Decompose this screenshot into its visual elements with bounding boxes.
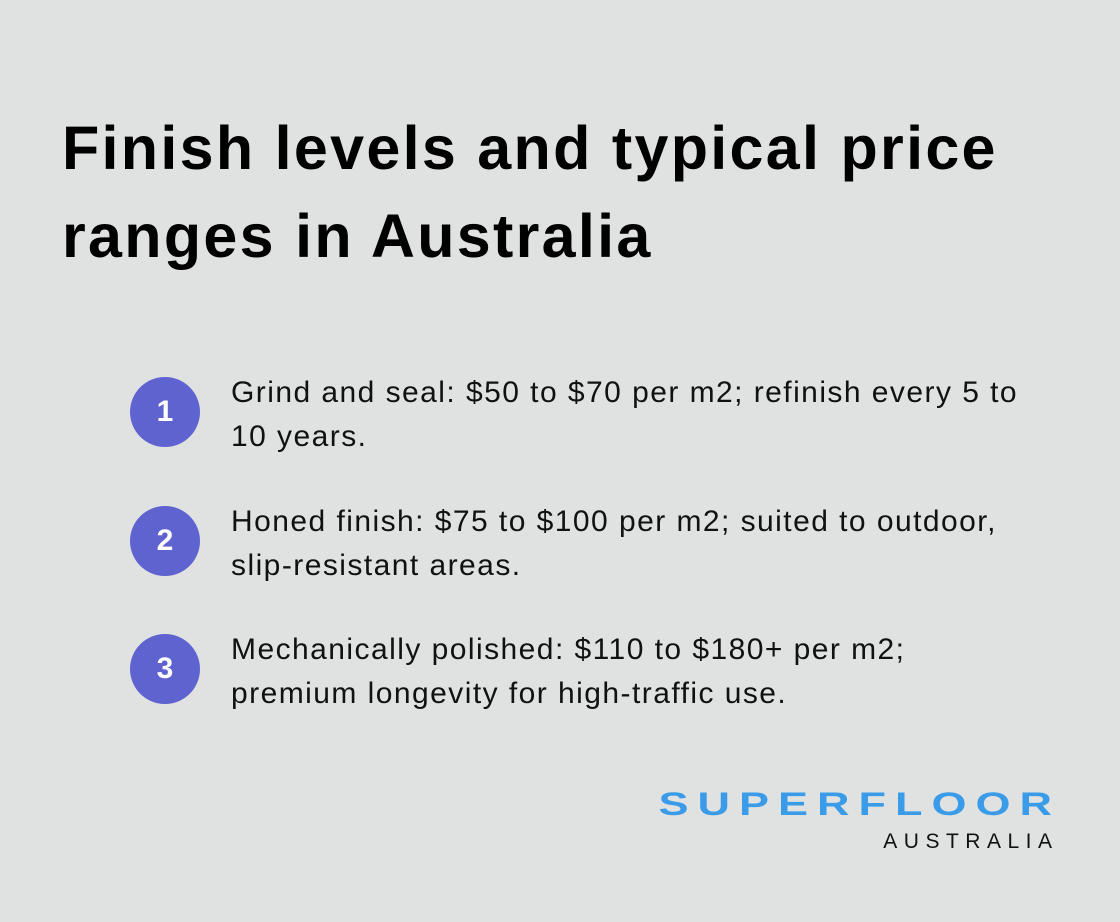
title xyxy=(62,114,998,270)
item 3 xyxy=(130,633,905,710)
badge 2 xyxy=(130,506,200,576)
badge 2: 2 xyxy=(157,524,173,557)
text 3: Mechanically polished: $110 to $180+ per m2; xyxy=(231,633,905,666)
item 2 xyxy=(130,505,997,582)
badge 1: 1 xyxy=(157,395,173,428)
badge 3 xyxy=(130,634,200,704)
badge 1 xyxy=(130,377,200,447)
text 2: Honed finish: $75 to $100 per m2; suited to outdoor, xyxy=(231,505,997,538)
logo xyxy=(658,786,1061,853)
text 1: 10 years. xyxy=(231,420,367,453)
text 2: slip-resistant areas. xyxy=(231,549,522,582)
text 3 xyxy=(231,633,905,710)
text 1 xyxy=(231,376,1018,453)
text 2 xyxy=(231,505,997,582)
logo subtitle: AUSTRALIA xyxy=(883,830,1058,853)
badge 3: 3 xyxy=(157,652,173,685)
title: ranges in Australia xyxy=(62,202,653,270)
item 1 xyxy=(130,376,1018,453)
title: Finish levels and typical price xyxy=(62,114,998,182)
text 1: Grind and seal: $50 to $70 per m2; refinish every 5 to xyxy=(231,376,1018,409)
text 3: premium longevity for high-traffic use. xyxy=(231,677,787,710)
logo wordmark: SUPERFLOOR xyxy=(658,786,1061,822)
